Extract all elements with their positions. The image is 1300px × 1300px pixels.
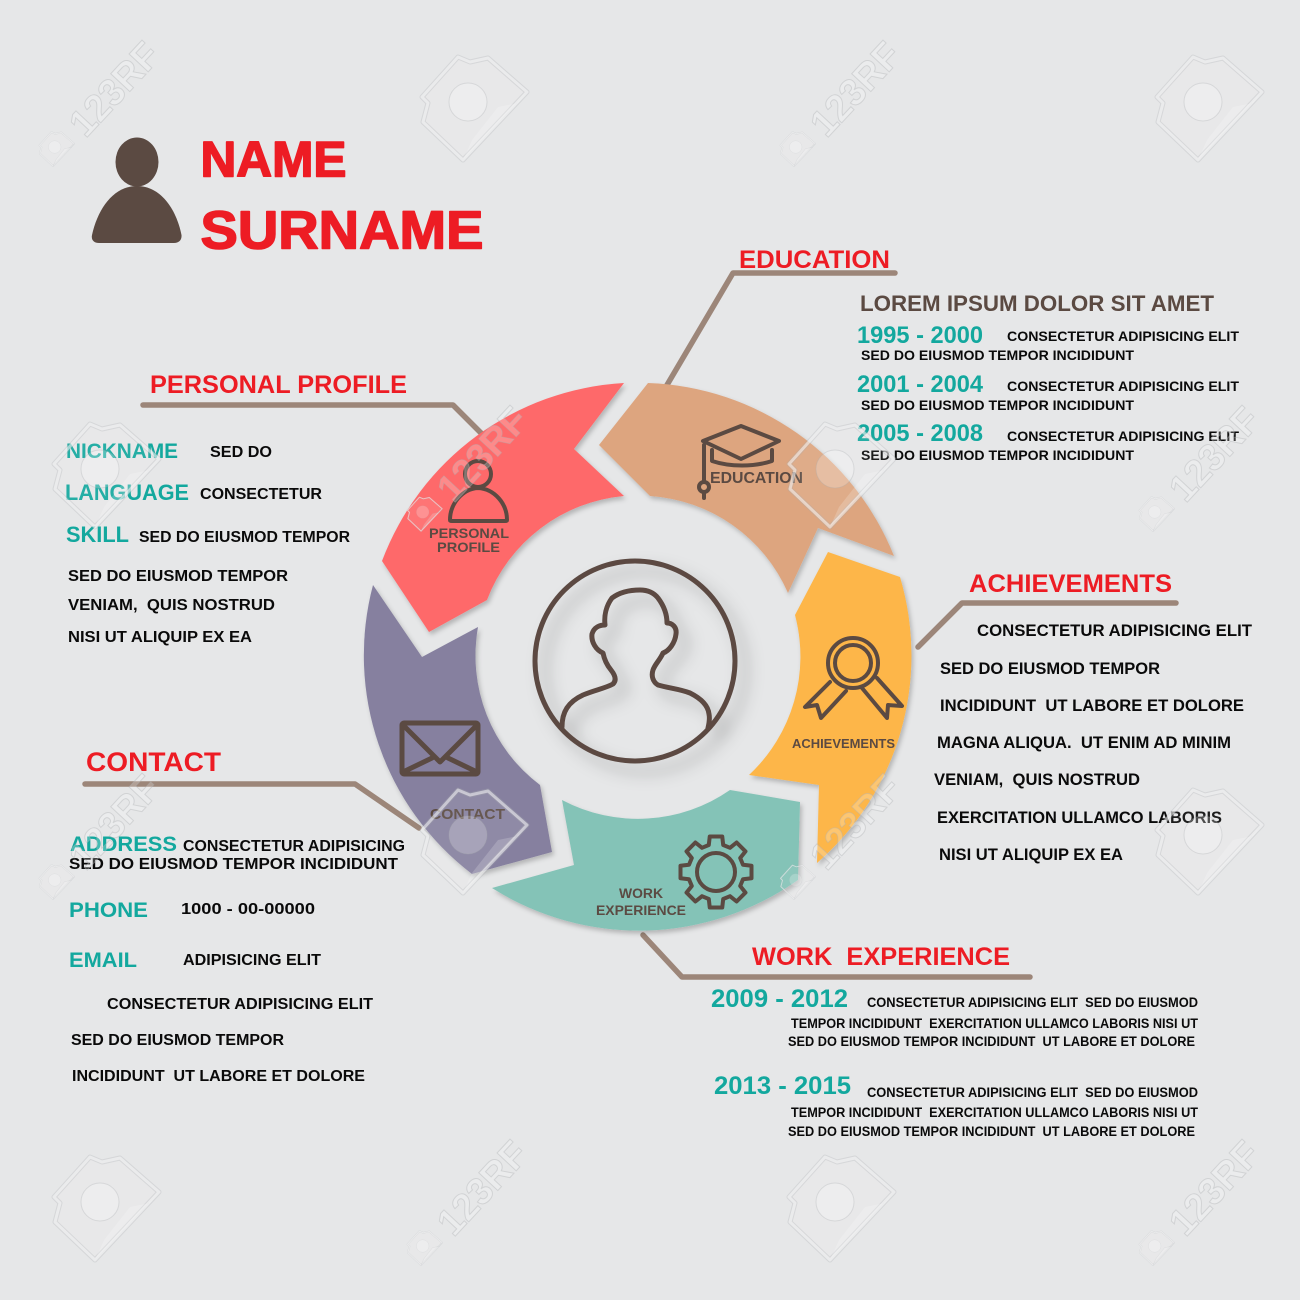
- panel: achievements: [934, 570, 1253, 864]
- panel: education: [739, 246, 1239, 463]
- icon: envelope: [402, 723, 478, 774]
- label: personal profile: PERSONAL: [429, 525, 509, 541]
- entry 2001-2004: SED DO EIUSMOD TEMPOR INCIDIDUNT: [861, 397, 1134, 413]
- entry 1995-2000: CONSECTETUR ADIPISICING ELIT: [1007, 328, 1239, 344]
- entry 2013-2015: SED DO EIUSMOD TEMPOR INCIDIDUNT UT LABORE ET DOLORE: [788, 1124, 1195, 1139]
- contact details: ADIPISICING ELIT: [183, 952, 321, 969]
- contact details: [69, 833, 405, 1085]
- profile details: SED DO: [210, 444, 272, 461]
- entry 2013-2015: CONSECTETUR ADIPISICING ELIT SED DO EIUSMOD: [867, 1085, 1198, 1100]
- wheel: [364, 383, 911, 931]
- segment: personal profile: [382, 383, 624, 632]
- profile details: SKILL: [66, 522, 129, 547]
- icon: person: [450, 461, 507, 521]
- entry 1995-2000: 1995 - 2000: [857, 322, 983, 349]
- icon: gear: [680, 836, 752, 908]
- entry 2005-2008: SED DO EIUSMOD TEMPOR INCIDIDUNT: [861, 447, 1134, 463]
- watermark marks: 123RF: [803, 767, 910, 878]
- entry 2005-2008: 2005 - 2008: [857, 420, 983, 447]
- subheading: LOREM IPSUM DOLOR SIT AMET: [860, 291, 1215, 316]
- profile details: VENIAM, QUIS NOSTRUD: [68, 597, 275, 614]
- entry 2009-2012: CONSECTETUR ADIPISICING ELIT SED DO EIUSMOD: [867, 995, 1198, 1010]
- entry 2009-2012: SED DO EIUSMOD TEMPOR INCIDIDUNT UT LABORE ET DOLORE: [788, 1034, 1195, 1049]
- label: personal profile: [429, 525, 509, 555]
- profile details: CONSECTETUR: [200, 486, 322, 503]
- entry 2009-2012: TEMPOR INCIDIDUNT EXERCITATION ULLAMCO LABORIS NISI UT: [791, 1016, 1199, 1031]
- label: education: EDUCATION: [710, 470, 803, 487]
- entry 2013-2015: TEMPOR INCIDIDUNT EXERCITATION ULLAMCO LABORIS NISI UT: [791, 1105, 1199, 1120]
- contact details: ADDRESS: [70, 833, 177, 856]
- contact details: SED DO EIUSMOD TEMPOR INCIDIDUNT: [69, 856, 398, 873]
- label: contact: CONTACT: [430, 806, 505, 823]
- achievements text: INCIDIDUNT UT LABORE ET DOLORE: [940, 696, 1244, 715]
- entry 2009-2012: 2009 - 2012: [711, 985, 848, 1013]
- contact details: CONSECTETUR ADIPISICING: [183, 838, 405, 855]
- center portrait icon: [535, 561, 735, 761]
- entry 2005-2008: [857, 420, 1239, 463]
- achievements text: CONSECTETUR ADIPISICING ELIT: [977, 621, 1253, 640]
- panel: contact: [69, 747, 405, 1085]
- profile details: SED DO EIUSMOD TEMPOR: [68, 568, 288, 585]
- segment: achievements: [749, 552, 911, 863]
- entry 2005-2008: CONSECTETUR ADIPISICING ELIT: [1007, 428, 1239, 444]
- label: work experience: EXPERIENCE: [596, 903, 686, 918]
- heading: personal profile: PERSONAL PROFILE: [150, 371, 407, 399]
- profile details: SED DO EIUSMOD TEMPOR: [139, 529, 350, 546]
- contact details: CONSECTETUR ADIPISICING ELIT: [107, 996, 373, 1013]
- heading: work experience: WORK EXPERIENCE: [752, 943, 1010, 971]
- contact details: INCIDIDUNT UT LABORE ET DOLORE: [72, 1068, 365, 1085]
- title: name: SURNAME: [200, 200, 484, 260]
- profile details: LANGUAGE: [65, 480, 189, 505]
- title: name: NAME: [200, 132, 346, 188]
- entry 2001-2004: CONSECTETUR ADIPISICING ELIT: [1007, 378, 1239, 394]
- label: work experience: WORK: [619, 886, 663, 901]
- entry 2009-2012: [711, 985, 1199, 1049]
- icon: graduation cap: [699, 426, 779, 498]
- panel: personal profile: [65, 371, 407, 646]
- achievements text: [934, 621, 1253, 864]
- watermark marks: 123RF: [62, 34, 169, 145]
- achievements text: VENIAM, QUIS NOSTRUD: [934, 770, 1140, 789]
- heading: education: EDUCATION: [739, 246, 890, 274]
- entry 1995-2000: [857, 322, 1239, 363]
- contact details: SED DO EIUSMOD TEMPOR: [71, 1032, 284, 1049]
- watermark marks: 123RF: [62, 767, 169, 878]
- entry 2001-2004: [857, 371, 1239, 413]
- entry 1995-2000: SED DO EIUSMOD TEMPOR INCIDIDUNT: [861, 347, 1134, 363]
- profile details: NISI UT ALIQUIP EX EA: [68, 629, 252, 646]
- watermark marks: 123RF: [803, 34, 910, 145]
- profile details: [65, 440, 350, 646]
- label: work experience: [596, 886, 686, 918]
- segment: education: [599, 383, 894, 593]
- connector lines: [85, 273, 1176, 977]
- segment: work experience: [492, 790, 800, 931]
- watermark marks: 123RF: [1162, 1133, 1269, 1244]
- panel: work experience: [711, 943, 1199, 1139]
- watermark marks: 123RF: [430, 1133, 537, 1244]
- heading: achievements: ACHIEVEMENTS: [969, 570, 1172, 598]
- watermark marks: 123RF: [430, 399, 537, 510]
- achievements text: MAGNA ALIQUA. UT ENIM AD MINIM: [937, 733, 1231, 752]
- label: personal profile: PROFILE: [437, 539, 500, 555]
- entry 2013-2015: 2013 - 2015: [714, 1072, 851, 1100]
- entry 2001-2004: 2001 - 2004: [857, 371, 984, 398]
- contact details: EMAIL: [69, 949, 137, 972]
- label: achievements: ACHIEVEMENTS: [792, 737, 895, 751]
- contact details: PHONE: [69, 899, 148, 922]
- heading: contact: CONTACT: [86, 747, 222, 777]
- segment: contact: [364, 585, 552, 874]
- watermark marks: 123RF: [1162, 399, 1269, 510]
- title: name: [200, 132, 484, 260]
- entry 2013-2015: [714, 1072, 1199, 1139]
- achievements text: NISI UT ALIQUIP EX EA: [939, 845, 1123, 864]
- icon: medal: [805, 638, 902, 718]
- profile details: NICKNAME: [66, 440, 178, 463]
- person avatar icon: [92, 138, 182, 243]
- achievements text: EXERCITATION ULLAMCO LABORIS: [937, 808, 1222, 827]
- achievements text: SED DO EIUSMOD TEMPOR: [940, 659, 1160, 678]
- contact details: 1000 - 00-00000: [181, 901, 315, 918]
